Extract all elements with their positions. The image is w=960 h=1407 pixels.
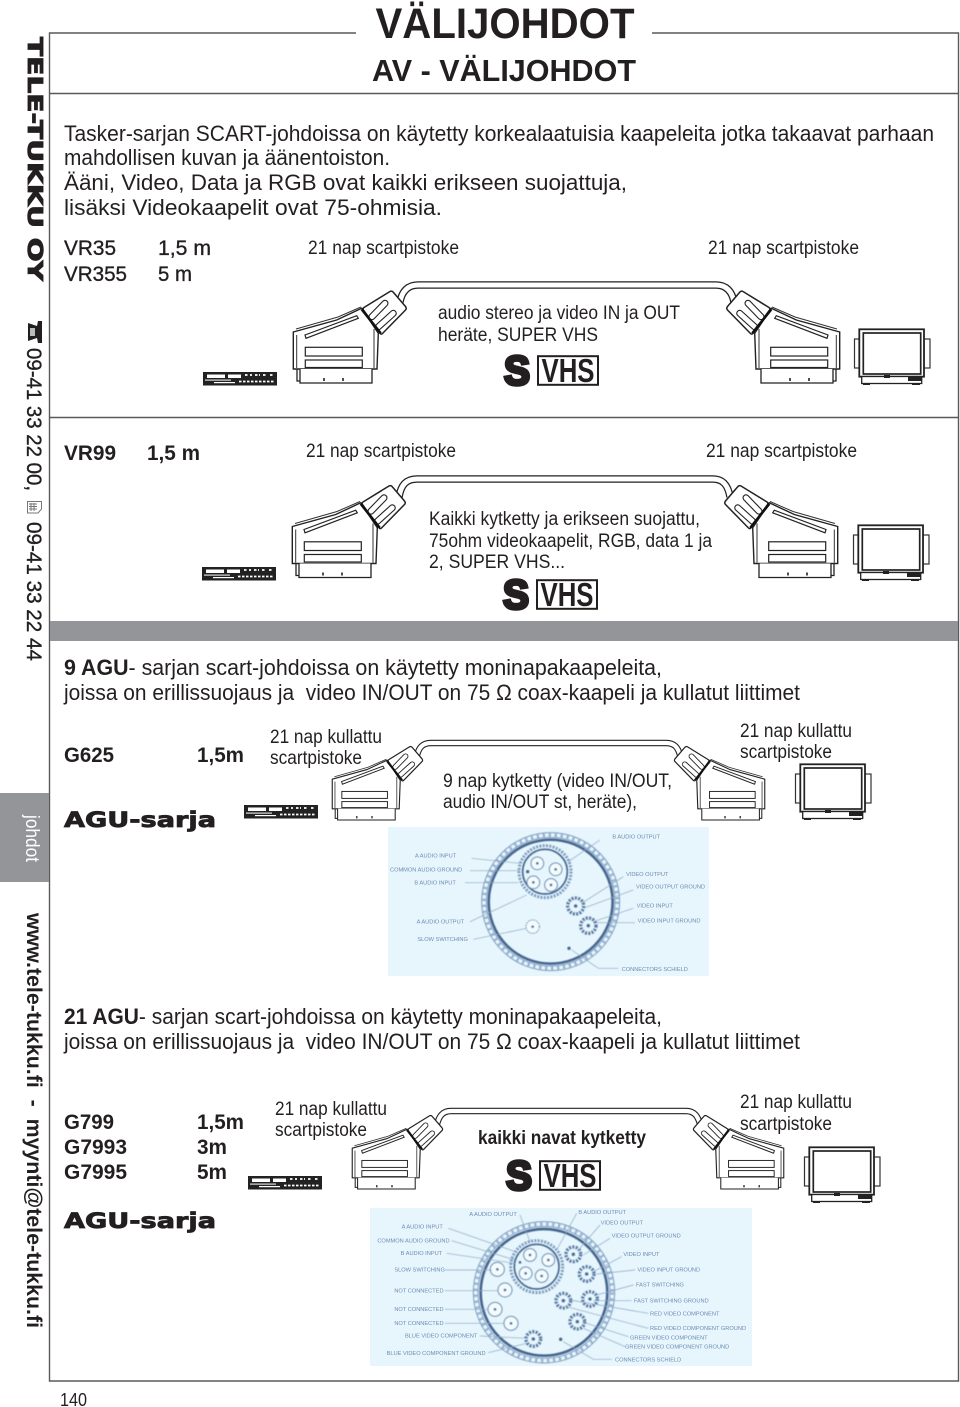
left scart plug (292, 486, 405, 578)
cable description (429, 509, 712, 573)
wiring diagram: 9-pin cable cross-section: A AUDIO OUTPUT (417, 919, 465, 925)
cable description: audio IN/OUT st, heräte), (443, 792, 637, 813)
series name: AGU-sarja (64, 808, 216, 832)
icon: television (854, 329, 930, 385)
icon: video recorder (202, 567, 276, 580)
intro text: Ääni, Video, Data ja RGB ovat kaikki erikseen suojattuja, (64, 170, 627, 195)
right scart plug (725, 486, 838, 578)
cable (399, 479, 730, 497)
cable description: 9 nap kytketty (video IN/OUT, (443, 771, 672, 792)
icon: telephone (28, 321, 42, 343)
right connector label: scartpistoke (740, 1114, 832, 1135)
wiring diagram: 21-pin cable cross-section: FAST SWITCHING (636, 1283, 684, 1289)
connector labels: 21 nap scartpistoke (308, 238, 459, 259)
wiring diagram: 21-pin cable cross-section: COMMON AUDIO GROUND (377, 1238, 450, 1244)
left connector label: scartpistoke (275, 1120, 367, 1141)
product: G625 (64, 721, 871, 832)
product code and length (64, 744, 244, 767)
section heading: 21 AGU: 21 AGU- sarjan scart-johdoissa on käytetty moninapakaapeleita, (64, 1004, 662, 1029)
connector labels (306, 441, 857, 462)
cable (400, 285, 734, 302)
product code and length: G625 (64, 744, 114, 767)
section tab: johdot (21, 814, 42, 863)
wiring diagram: 9-pin cable cross-section: CONNECTORS SCHIELD (622, 967, 688, 973)
section heading: 21 AGU: joissa on erillissuojaus ja video IN/OUT on 75 Ω coax-kaapeli ja kullatut liittimet (63, 1029, 800, 1054)
left connector label (270, 727, 382, 769)
wiring diagram: 21-pin cable cross-section: BLUE VIDEO COMPONENT (405, 1334, 478, 1340)
wiring diagram: 21-pin cable cross-section: A AUDIO OUTPUT (469, 1212, 517, 1218)
wiring diagram: 21-pin cable cross-section: NOT CONNECTED (394, 1307, 444, 1313)
company name: TELE-TUKKU OY (23, 37, 47, 282)
wiring diagram: 9-pin cable cross-section: VIDEO OUTPUT GROUND (636, 884, 705, 890)
right scart plug (727, 291, 840, 383)
sidebar: company contact strip (0, 37, 49, 1328)
product: G799 / G7993 / G7995 (64, 1092, 880, 1233)
wiring diagram: 21-pin cable cross-section: RED VIDEO COMPONENT (650, 1312, 720, 1318)
cable description: 2, SUPER VHS... (429, 552, 565, 573)
series name: AGU-sarja (64, 1209, 216, 1233)
S-VHS logo (506, 1152, 600, 1198)
wiring diagram: 21-pin cable cross-section: FAST SWITCHING GROUND (634, 1298, 709, 1304)
right connector label (740, 1092, 852, 1135)
section tab (0, 793, 49, 882)
connector labels: 21 nap scartpistoke (306, 441, 456, 462)
wiring diagram: 21-pin cable cross-section (370, 1208, 752, 1366)
icon: fax (28, 502, 42, 513)
product code and length: VR99 (64, 442, 116, 465)
cable description: Kaikki kytketty ja erikseen suojattu, (429, 509, 700, 530)
left scart plug (332, 747, 423, 820)
product code and length: 1,5m (197, 744, 244, 767)
wiring diagram: 9-pin cable cross-section: VIDEO INPUT (637, 903, 673, 909)
wiring diagram: 21-pin cable cross-section: VIDEO OUTPUT GROUND (612, 1234, 681, 1240)
product codes and lengths: 1,5 m (158, 237, 211, 260)
connector labels (308, 238, 859, 259)
product codes and lengths: 5m (197, 1161, 227, 1184)
wiring diagram: 9-pin cable cross-section: VIDEO INPUT GROUND (638, 919, 700, 925)
wiring diagram: 9-pin cable cross-section: B AUDIO INPUT (414, 880, 456, 886)
icon: television (804, 1147, 880, 1203)
connector labels: 21 nap scartpistoke (708, 238, 859, 259)
product codes and lengths: 3m (197, 1136, 227, 1159)
cable (417, 743, 680, 755)
left connector label: 21 nap kullattu (275, 1099, 387, 1120)
right connector label: 21 nap kullattu (740, 721, 852, 742)
icon: video recorder (248, 1176, 322, 1190)
cable description: heräte, SUPER VHS (438, 325, 598, 346)
subtitle: AV - VÄLIJOHDOT (372, 53, 636, 88)
left scart plug (293, 291, 406, 383)
section heading: 9 AGU (63, 655, 800, 705)
wiring diagram: 9-pin cable cross-section: A AUDIO INPUT (415, 853, 457, 859)
cable description: kaikki navat kytketty (478, 1128, 646, 1149)
wiring diagram: 21-pin cable cross-section: GREEN VIDEO COMPONENT (630, 1335, 708, 1341)
right scart plug (693, 1116, 784, 1189)
product codes and lengths: G7995 (64, 1161, 127, 1184)
product codes and lengths: VR355 (64, 263, 127, 286)
right connector label: 21 nap kullattu (740, 1092, 852, 1113)
product code and length (64, 442, 200, 465)
wiring diagram: 21-pin cable cross-section: VIDEO INPUT (623, 1252, 660, 1258)
product codes and lengths (64, 1111, 244, 1184)
S-VHS logo (504, 348, 598, 394)
left scart plug (352, 1116, 443, 1189)
cable (437, 1111, 700, 1124)
section heading: 9 AGU: 9 AGU- sarjan scart-johdoissa on käytetty moninapakaapeleita, (64, 655, 662, 680)
left connector label: 21 nap kullattu (270, 727, 382, 748)
product codes and lengths: G7993 (64, 1136, 127, 1159)
wiring diagram: 21-pin cable cross-section: SLOW SWITCHING (394, 1268, 445, 1274)
wiring diagram: 9-pin cable cross-section: COMMON AUDIO GROUND (390, 868, 462, 874)
product codes and lengths: 1,5m (197, 1111, 244, 1134)
product: VR35 / VR355 (64, 237, 930, 394)
intro text: lisäksi Videokaapelit ovat 75-ohmisia. (64, 195, 442, 220)
wiring diagram: 21-pin cable cross-section: CONNECTORS SCHIELD (615, 1358, 681, 1364)
wiring diagram: 21-pin cable cross-section: RED VIDEO COMPONENT GROUND (650, 1326, 746, 1332)
wiring diagram: 21-pin cable cross-section: GREEN VIDEO COMPONENT GROUND (625, 1344, 729, 1350)
wiring diagram: 21-pin cable cross-section: NOT CONNECTED (394, 1321, 444, 1327)
product codes and lengths: VR35 (64, 237, 116, 260)
cable description (443, 771, 672, 813)
wiring diagram: 21-pin cable cross-section: VIDEO INPUT GROUND (637, 1268, 700, 1274)
right connector label (740, 721, 852, 763)
section heading: 21 AGU (63, 1004, 800, 1054)
web and email: www.tele-tukku.fi - myynti@tele-tukku.fi (22, 912, 45, 1328)
product codes and lengths: G799 (64, 1111, 114, 1134)
fax number: 09-41 33 22 44 (22, 522, 45, 661)
intro text: mahdollisen kuvan ja äänentoiston. (64, 145, 390, 170)
wiring diagram: 21-pin cable cross-section: B AUDIO INPUT (401, 1251, 443, 1257)
cable description: audio stereo ja video IN ja OUT (438, 303, 680, 324)
left connector label (275, 1099, 387, 1141)
product codes and lengths: 5 m (158, 263, 192, 286)
intro text (64, 121, 934, 220)
phone number: 09-41 33 22 00, (22, 348, 45, 491)
left connector label: scartpistoke (270, 748, 362, 769)
wiring diagram: 9-pin cable cross-section: VIDEO OUTPUT (626, 872, 669, 878)
wiring diagram: 21-pin cable cross-section: VIDEO OUTPUT (601, 1220, 644, 1226)
wiring diagram: 21-pin cable cross-section: B AUDIO OUTPUT (578, 1210, 627, 1216)
wiring diagram: 9-pin cable cross-section: SLOW SWITCHING (417, 937, 468, 943)
icon: television (796, 764, 871, 820)
section heading: 9 AGU: joissa on erillissuojaus ja video IN/OUT on 75 Ω coax-kaapeli ja kullatut liittimet (63, 680, 800, 705)
product: VR99 (64, 441, 929, 618)
product code and length: 1,5 m (147, 442, 200, 465)
right connector label: scartpistoke (740, 742, 832, 763)
wiring diagram: 21-pin cable cross-section: A AUDIO INPUT (402, 1224, 443, 1230)
wiring diagram: 9-pin cable cross-section (388, 827, 709, 976)
wiring diagram: 21-pin cable cross-section: NOT CONNECTED (394, 1288, 444, 1294)
wiring diagram: 9-pin cable cross-section: B AUDIO OUTPUT (612, 835, 661, 841)
icon: video recorder (203, 372, 277, 386)
divider band (50, 621, 958, 641)
icon: video recorder (244, 805, 318, 818)
connector labels: 21 nap scartpistoke (706, 441, 857, 462)
right scart plug (674, 747, 765, 820)
cable description: 75ohm videokaapelit, RGB, data 1 ja (429, 531, 712, 552)
product codes and lengths (64, 237, 211, 286)
title: VÄLIJOHDOT (376, 0, 634, 48)
cable description (438, 303, 680, 346)
wiring diagram: 21-pin cable cross-section: BLUE VIDEO COMPONENT GROUND (387, 1351, 486, 1357)
intro text: Tasker-sarjan SCART-johdoissa on käytetty korkealaatuisia kaapeleita jotka takaavat parhaan (64, 121, 934, 146)
S-VHS logo (503, 572, 597, 618)
icon: television (854, 525, 929, 581)
